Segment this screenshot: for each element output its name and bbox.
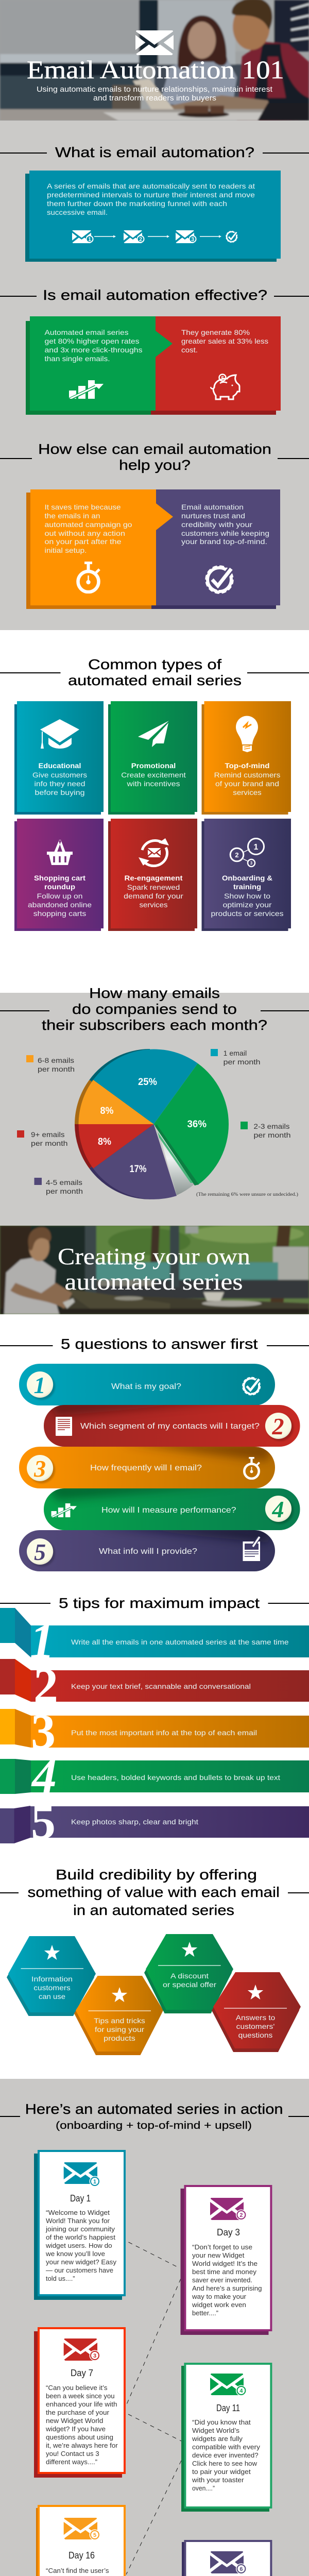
section heading: How many emails do companies send: do companies send to [72, 1001, 237, 1017]
email text [45, 2209, 117, 2282]
open rate text: than single emails. [44, 354, 110, 363]
day label: Day 16 [68, 2550, 95, 2561]
legend: 2-3 emails per month: 2-3 emails [253, 1122, 289, 1130]
card text [121, 761, 186, 788]
icon: numbered circles: 2 [235, 851, 239, 859]
day label: Day 1 [70, 2193, 91, 2204]
card text [28, 874, 92, 918]
hexagon text: Answers to [236, 2013, 275, 2022]
email text: way to make your [192, 2293, 247, 2300]
legend: 2-3 emails per month: per month [253, 1131, 290, 1139]
email text [192, 2418, 261, 2492]
hexagon text: customers' [236, 2022, 274, 2030]
flow: three emails leading to a check badge: 3 [191, 236, 194, 243]
panel: Onboarding & training card [202, 819, 291, 931]
icon: star [182, 1942, 197, 1957]
icon: rising bar chart [52, 1503, 77, 1518]
card text: Follow up on [37, 892, 82, 900]
icon: envelope 6: 6 [239, 2566, 243, 2572]
panel: Shopping cart roundup card [14, 819, 104, 931]
hexagon text: or special offer [163, 1980, 216, 1989]
chart footnote: (The remaining 6% were unsure or undecided.) [196, 1192, 298, 1197]
card text: services [233, 788, 262, 796]
email card: Day 1 [34, 2151, 125, 2300]
saves time text: It saves time because [44, 503, 121, 511]
email text: widget? If you have [45, 2425, 106, 2433]
icon: graduation cap [40, 719, 79, 749]
email text: we know you’ll love [45, 2250, 105, 2258]
email text: oven....” [192, 2484, 215, 2492]
banner: woman with phone at cafe, Creating your own automated series [0, 1225, 309, 1314]
panel: Re-engagement card [108, 819, 197, 931]
hexagon: a discount or special offer [144, 1934, 233, 2013]
definition text: successive email. [47, 208, 108, 216]
tip ribbon 4 [0, 1749, 309, 1804]
number badge 4: 4 [272, 1496, 284, 1522]
saves time text: automated campaign go [44, 520, 132, 529]
legend: 9+ emails per month: 9+ emails [31, 1130, 65, 1139]
card text [214, 761, 280, 796]
tip text: Write all the emails in one automated series at the same time [71, 1638, 289, 1646]
email card: Day 16 [36, 2506, 125, 2576]
email text: told us....” [46, 2275, 75, 2282]
card text: products or services [211, 909, 283, 918]
icon: envelope 2 [210, 2198, 247, 2221]
email text: you! Contact us 3 [46, 2450, 99, 2458]
definition text: them further down the marketing funnel with each [47, 199, 227, 208]
card text: of your brand and [215, 779, 279, 788]
day label: Day 3 [217, 2227, 240, 2238]
email text: best time and money [192, 2268, 257, 2276]
number badge 1 [27, 1371, 55, 1400]
tip ribbon 3 [0, 1704, 309, 1759]
hexagon text [236, 2013, 275, 2039]
icon: envelope 6 [210, 2551, 247, 2574]
email text: widget work even [192, 2301, 246, 2309]
banner title [58, 1243, 250, 1295]
card text: Promotional [131, 761, 176, 770]
card text: Shopping cart [34, 874, 85, 882]
email text: with your toaster [192, 2476, 244, 2484]
email text: “Can’t find the user’s [46, 2567, 109, 2574]
section heading: Build credibility: in an automated series [73, 1902, 234, 1918]
card text: demand for your [124, 892, 183, 900]
icon: piggy bank [211, 374, 239, 399]
icon: light bulb [236, 716, 258, 752]
email text: been a week since you [46, 2392, 115, 2400]
section heading: Is email automation effective?: Is email automation effective? [43, 287, 267, 303]
subtitle [37, 86, 272, 103]
number badge 2 [265, 1413, 294, 1441]
dashed connectors between emails [126, 2242, 182, 2576]
question text: What is my goal? [111, 1382, 181, 1391]
hexagon text: can use [39, 1992, 65, 2001]
saves time text: out without any action [44, 529, 125, 537]
sales text [181, 328, 268, 354]
card text: Create excitement [121, 771, 186, 779]
email text: your new widget? Easy [46, 2258, 117, 2266]
tip text: Keep photos sharp, clear and bright [71, 1818, 198, 1826]
email text: “Did you know that [192, 2418, 251, 2426]
card text: shopping carts [33, 909, 86, 918]
definition text: A series of emails that are automatically sent to readers at [47, 182, 255, 190]
trust text: your brand top-of-mind. [181, 537, 267, 546]
legend: 4-5 emails per month: 4-5 emails [46, 1178, 82, 1187]
section heading: How many emails do companies send: How many emails [89, 985, 220, 1001]
icon: envelope 4 [210, 2374, 247, 2396]
legend: 1 email per month: 1 email [224, 1049, 247, 1057]
icon: envelope 2: 2 [239, 2212, 243, 2218]
icon: envelope 1 [64, 2162, 100, 2187]
icon: envelope 5 [64, 2518, 100, 2540]
icon: star [112, 1987, 127, 2002]
card text: roundup [44, 883, 75, 891]
section heading: How many emails do companies send [0, 985, 309, 1033]
legend: 9+ emails per month: per month [31, 1139, 68, 1147]
question text: How frequently will I email? [90, 1464, 202, 1472]
email text: “Welcome to Widget [46, 2209, 110, 2216]
banner title: Creating your own [58, 1243, 250, 1269]
banner title: automated series [65, 1268, 243, 1295]
card text: Top-of-mind [225, 761, 270, 770]
card text: Re-engagement [125, 874, 183, 882]
tip text: Put the most important info at the top of each email [71, 1728, 257, 1737]
card text: before buying [35, 788, 84, 796]
hexagon text: A discount [170, 1972, 209, 1980]
number badge 5: 5 [34, 1539, 46, 1565]
pie chart [75, 1049, 229, 1199]
legend: 6-8 emails per month: 6-8 emails [38, 1056, 74, 1064]
legend: 4-5 emails per month [34, 1178, 83, 1195]
legend: 6-8 emails per month: per month [38, 1065, 75, 1073]
card text: info they need [34, 779, 85, 788]
percentage labels: 17% [130, 1164, 147, 1175]
icon: envelope [135, 30, 174, 55]
definition text [47, 182, 255, 216]
icon: star [44, 1945, 60, 1960]
number badge 3: 3 [33, 1455, 46, 1482]
icon: paper airplane [138, 721, 169, 747]
number badge 3 [27, 1455, 55, 1483]
open rate text: Automated email series [44, 328, 129, 336]
trust text [181, 503, 269, 546]
hexagon text [94, 2016, 145, 2042]
hexagon text: Tips and tricks [94, 2016, 145, 2025]
icon: document [56, 1417, 72, 1436]
section heading: Build credibility: Build credibility by offering [56, 1867, 257, 1883]
legend: 1 email per month: per month [224, 1058, 261, 1066]
number 1: 1 [30, 1613, 55, 1668]
panel: other benefits [26, 489, 280, 609]
grey section background: automated series [0, 2079, 309, 2576]
number badge 1: 1 [34, 1372, 45, 1398]
email text: better....” [192, 2309, 218, 2317]
question text: How will I measure performance? [101, 1506, 236, 1515]
tip ribbon 2 [0, 1658, 309, 1713]
sales text: greater sales at 33% less [181, 337, 268, 345]
percentage labels: 8% [100, 1106, 114, 1116]
email text: widgets are fully [192, 2435, 243, 2443]
icon: envelope 4: 4 [239, 2388, 243, 2394]
icon: document with pen [243, 1537, 260, 1561]
section heading: Build credibility: something of value with each email [28, 1884, 280, 1900]
icon: envelope 3: 3 [93, 2353, 96, 2359]
email text: device ever invented? [192, 2451, 259, 2459]
email text: new Widget World [46, 2417, 103, 2425]
email text: your new Widget [192, 2251, 245, 2259]
flow: three emails leading to a check badge [72, 230, 237, 243]
email text: joining our community [45, 2225, 115, 2233]
email text: questions about using [46, 2433, 113, 2441]
icon: stopwatch [244, 1458, 260, 1479]
section heading: Build credibility [0, 1867, 309, 1918]
card text [211, 874, 283, 918]
card text: abandoned online [28, 901, 92, 909]
email text: Widget World’s [192, 2427, 240, 2434]
icon: envelope 1: 1 [93, 2179, 96, 2185]
legend: 1 email per month [211, 1049, 261, 1066]
email text: different ways....” [46, 2458, 97, 2466]
panel: effectiveness stats [26, 316, 281, 415]
trust text: credibility with your [181, 520, 252, 529]
number badge 5 [27, 1538, 55, 1567]
hexagon: tips and tricks [74, 1976, 163, 2055]
card text: services [139, 901, 168, 909]
hexagon text: Information [31, 1975, 73, 1983]
percentage labels: 8% [98, 1137, 111, 1147]
panel: Educational card [14, 701, 104, 815]
icon: stopwatch [78, 563, 99, 592]
panel: Top-of-mind card [202, 701, 291, 815]
grey section background: intro [0, 121, 309, 630]
percentage labels: 36% [187, 1119, 207, 1130]
hexagon text: for using your [95, 2025, 144, 2033]
number 2: 2 [33, 1658, 58, 1713]
subtitle: and transform readers into buyers [93, 94, 216, 103]
email text: Click here to see how [192, 2460, 258, 2467]
section heading: How many emails do companies send: their subscribers each month? [42, 1017, 267, 1033]
question pill 3 [19, 1443, 275, 1488]
number badge 2: 2 [272, 1413, 284, 1439]
section heading: What is email automation?: What is email automation? [55, 144, 254, 160]
email text: it, we’re always here for [46, 2442, 118, 2449]
grey section background: pie chart [0, 993, 309, 1226]
question pill 5 [19, 1526, 275, 1571]
hexagon: information customers can use [7, 1936, 96, 2016]
icon: numbered circles: 3 [250, 861, 253, 866]
section heading: How else can email automation help you?: help you? [119, 457, 191, 473]
hero banner: photo of two people at a laptop with title [0, 0, 309, 121]
number 5: 5 [31, 1794, 56, 1849]
banner photo [0, 1225, 309, 1314]
title: Email Automation 101 [27, 55, 284, 84]
icon: numbered circles: 1 [254, 843, 259, 852]
section heading: Common types of automated email series [0, 656, 309, 688]
email text: compatible with every [192, 2443, 261, 2451]
card text: training [233, 883, 261, 891]
saves time text [44, 503, 132, 554]
email card: Day 11 [181, 2364, 271, 2512]
card text: Show how to [224, 892, 270, 900]
section heading: Here's an automated series in action [0, 2101, 309, 2131]
saves time text: the emails in an [44, 512, 100, 520]
section heading: 5 questions to answer first: 5 questions to answer first [61, 1336, 258, 1352]
email text: “Don’t forget to use [192, 2243, 252, 2251]
question pill 2 [44, 1400, 300, 1447]
card text: Onboarding & [222, 874, 272, 882]
icon: envelope 3 [64, 2338, 100, 2361]
number 3: 3 [31, 1704, 56, 1759]
email text: enhanced your life with [46, 2400, 117, 2408]
legend: 4-5 emails per month: per month [46, 1187, 83, 1195]
section heading: Here's an automated series in action: Here’s an automated series in action [25, 2101, 283, 2117]
section heading: Common types of automated email series: Common types of [88, 656, 221, 672]
card text [32, 761, 87, 796]
email text: of the world’s happiest [46, 2233, 115, 2241]
email card: Day 7 [34, 2328, 125, 2478]
card text [124, 874, 183, 909]
legend: 2-3 emails per month [241, 1122, 290, 1139]
icon: rising bar chart [69, 380, 104, 399]
email text [45, 2384, 118, 2466]
hexagon text [163, 1972, 216, 1989]
icon: piggy bank: $ [221, 376, 224, 381]
email text: “Can you believe it’s [46, 2384, 108, 2392]
email text: saver ever invented. [192, 2276, 252, 2284]
section heading: How else can email automation help you? [0, 441, 309, 473]
day label: Day 11 [216, 2403, 240, 2413]
icon: envelope 5: 5 [93, 2532, 96, 2538]
card text: Remind customers [214, 771, 280, 779]
hexagon text: questions [238, 2031, 272, 2039]
tip ribbon 5 [0, 1794, 309, 1849]
tip text: Use headers, bolded keywords and bullets to break up text [71, 1773, 280, 1782]
number 4: 4 [31, 1749, 57, 1804]
section heading: Here's an automated series in action: (onboarding + top-of-mind + upsell) [56, 2120, 252, 2131]
flow: three emails leading to a check badge: 1 [88, 236, 91, 243]
legend: 9+ emails per month [17, 1130, 68, 1147]
legend: 6-8 emails per month [26, 1055, 75, 1073]
email card: Day 3 [180, 2186, 271, 2335]
trust text: nurtures trust and [181, 512, 245, 520]
email text: — our customers have [46, 2266, 113, 2274]
icon: email with circular arrows [139, 838, 169, 866]
email text: World widget! It’s the [192, 2260, 258, 2267]
saves time text: on your part after the [44, 537, 122, 546]
day label: Day 7 [71, 2368, 93, 2378]
hero photo [0, 0, 309, 121]
email text: the purchase of your [46, 2409, 110, 2416]
panel: Promotional card [108, 701, 197, 815]
card text: Spark renewed [127, 883, 180, 891]
email text [192, 2243, 262, 2317]
question pill 1 [19, 1364, 275, 1405]
email text: World! Thank you for [46, 2217, 110, 2225]
card text: Educational [38, 761, 81, 770]
question text: What info will I provide? [99, 1547, 197, 1556]
open rate text: and 3x more click-throughs [44, 346, 142, 354]
question pill 4 [44, 1484, 300, 1530]
open rate text [44, 328, 142, 363]
section heading: Common types of automated email series: automated email series [68, 672, 242, 688]
trust text: Email automation [181, 503, 244, 511]
number badge 4 [265, 1496, 294, 1524]
percentage labels [98, 1077, 207, 1175]
sales text: They generate 80% [181, 328, 250, 336]
icon: shopping basket [47, 840, 73, 865]
section heading: How else can email automation help you?: How else can email automation [38, 441, 271, 457]
saves time text: initial setup. [44, 546, 87, 554]
flow: three emails leading to a check badge: 2 [139, 236, 142, 243]
hexagon text: customers [33, 1984, 71, 1992]
open rate text: get 80% higher open rates [44, 337, 139, 345]
tip ribbon 1 [0, 1608, 309, 1668]
email text: And here’s a surprising [192, 2284, 262, 2292]
section heading: 5 tips for maximum impact: 5 tips for maximum impact [59, 1595, 260, 1611]
panel: definition of email automation [25, 171, 281, 262]
card text: optimize your [222, 901, 272, 909]
hexagon text: products [104, 2034, 135, 2042]
email card: Day 21 [182, 2541, 271, 2576]
trust text: customers while keeping [181, 529, 269, 537]
icon: numbered circles [230, 839, 264, 867]
email text: widget users. How do [45, 2242, 112, 2249]
percentage labels: 25% [138, 1077, 157, 1088]
icon: check seal [206, 566, 233, 593]
hexagon: answers to customers' questions [212, 1972, 301, 2052]
email text: to pair your widget [192, 2468, 251, 2476]
icon: star [248, 1985, 263, 1999]
card text: Give customers [32, 771, 87, 779]
definition text: predetermined intervals to nurture their interest and move [47, 191, 255, 199]
subtitle: Using automatic emails to nurture relationships, maintain interest [37, 86, 272, 94]
hexagon text [31, 1975, 73, 2001]
question text: Which segment of my contacts will I target? [80, 1422, 260, 1431]
card text: with incentives [126, 779, 180, 788]
tip text: Keep your text brief, scannable and conversational [71, 1682, 251, 1690]
icon: check seal [243, 1378, 260, 1395]
sales text: cost. [181, 346, 198, 354]
